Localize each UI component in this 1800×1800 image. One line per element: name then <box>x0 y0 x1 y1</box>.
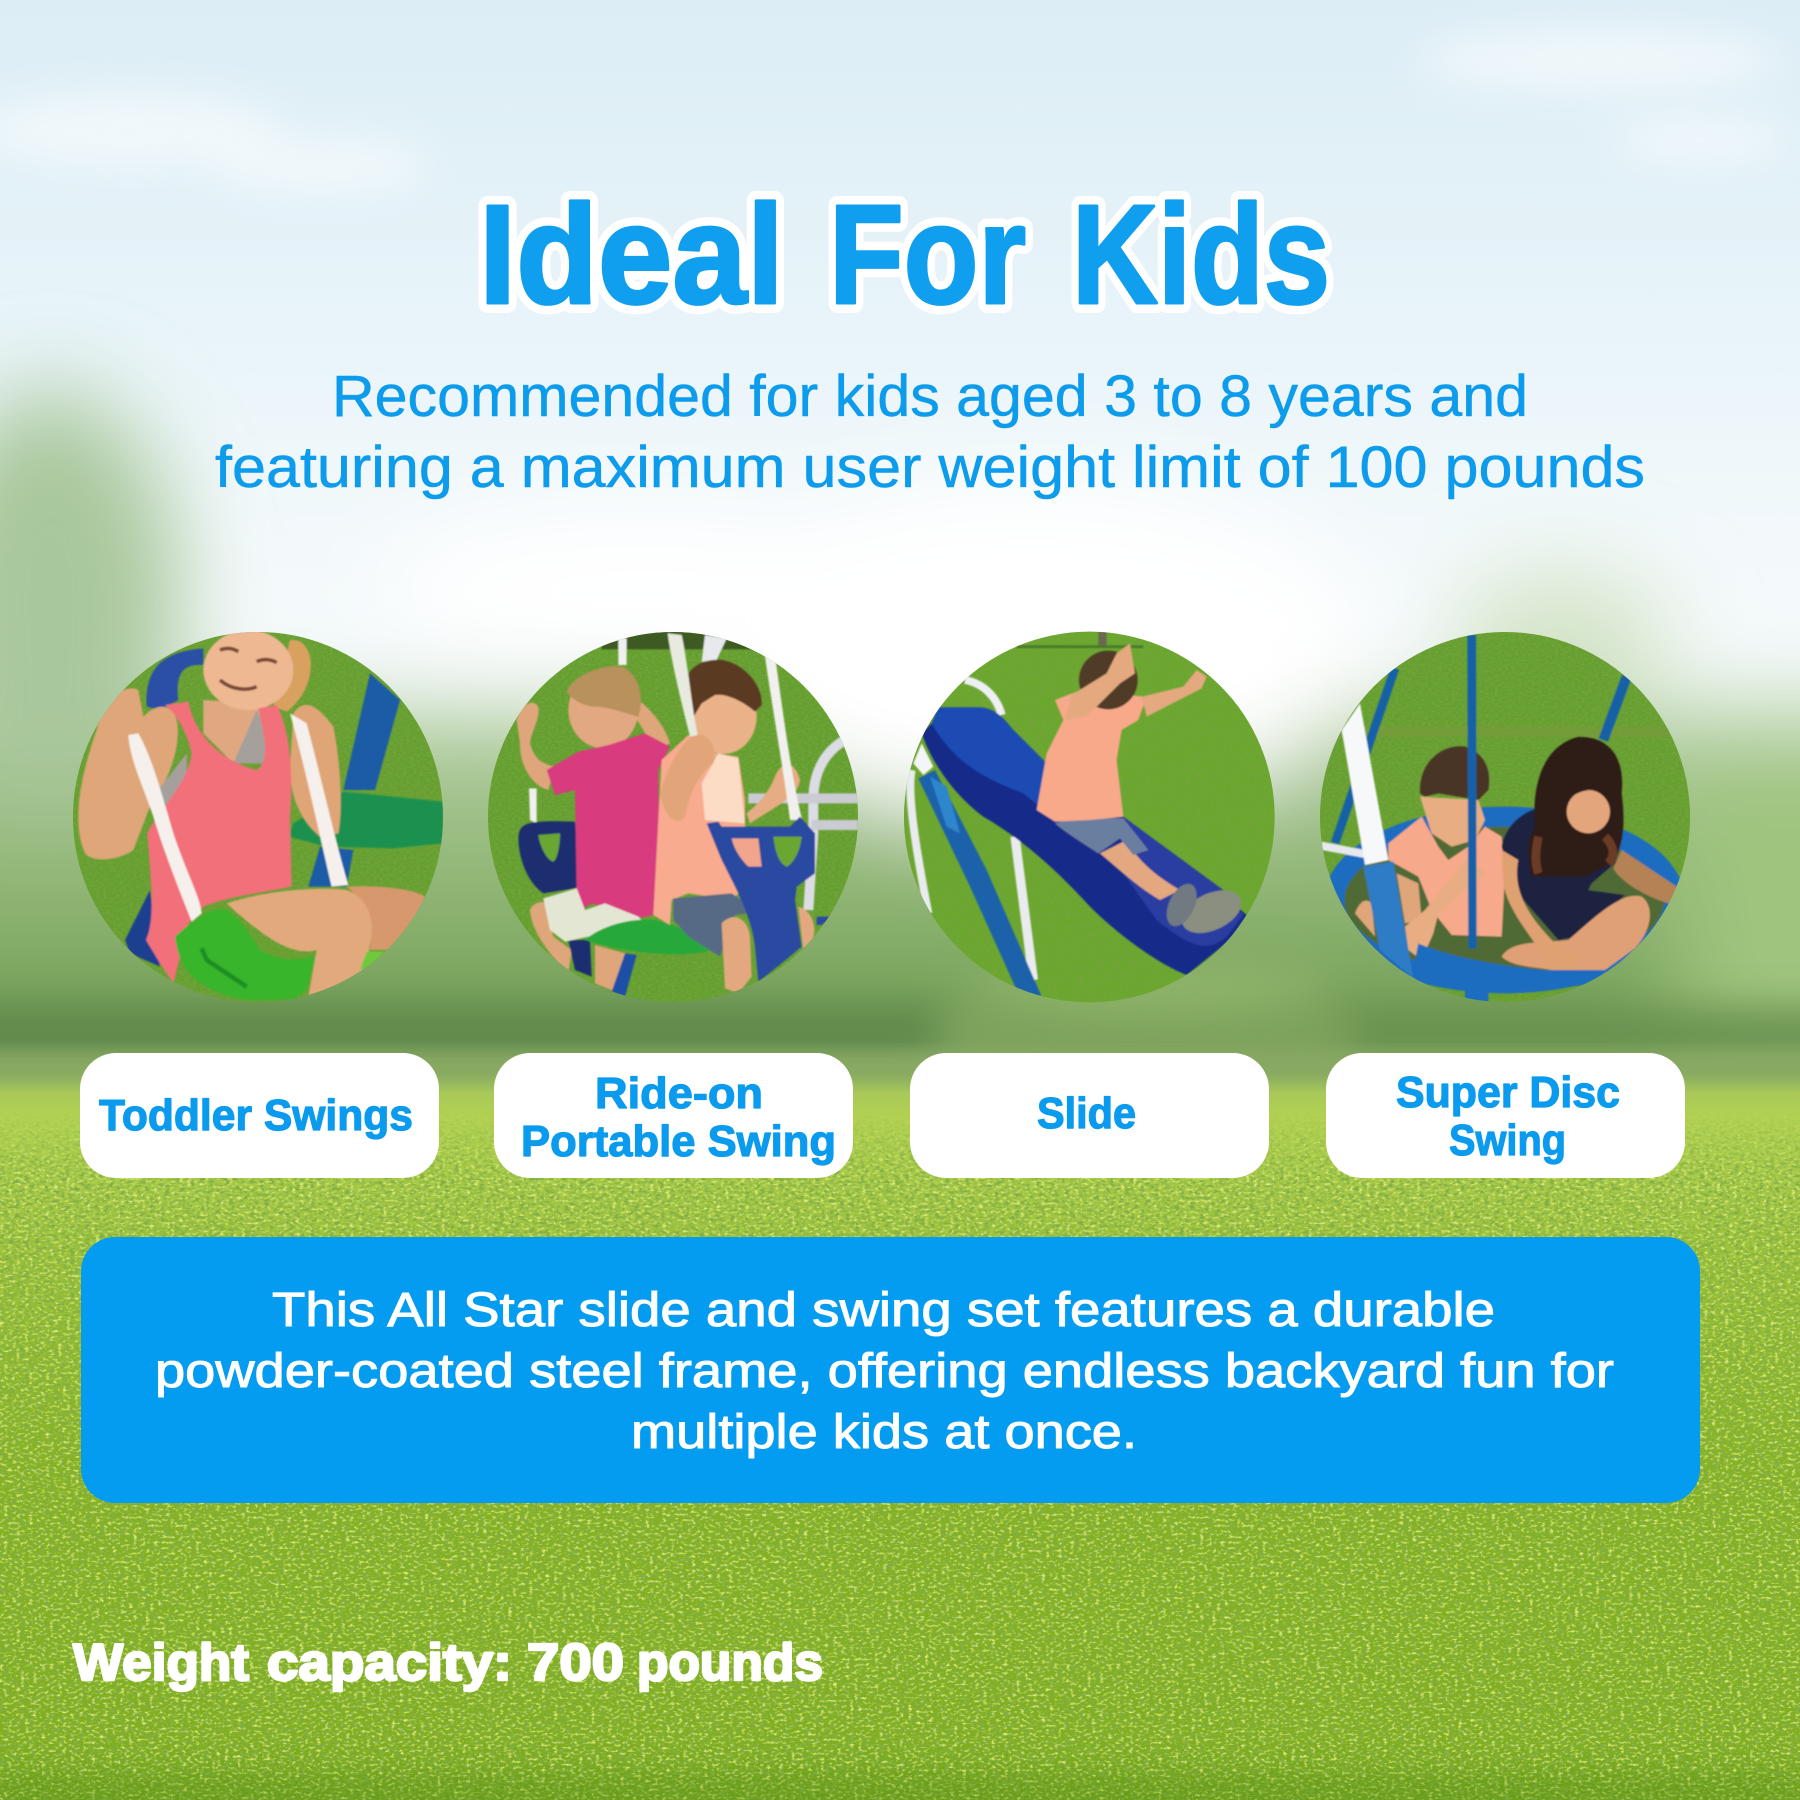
weight capacity note: Weight <box>73 1634 249 1692</box>
label: super disc swing: Super Disc <box>1396 1068 1620 1117</box>
callout panel: product description: powder-coated steel frame, offering endless backyard fun for <box>155 1345 1614 1398</box>
label: slide <box>910 1053 1269 1178</box>
title: Kids <box>1072 175 1330 333</box>
title: For <box>829 175 1026 333</box>
label: super disc swing <box>1326 1053 1685 1178</box>
subtitle: featuring a maximum user weight limit of 100 pounds <box>215 435 1645 500</box>
label: super disc swing: Swing <box>1449 1116 1566 1165</box>
callout panel: product description <box>81 1237 1700 1503</box>
label: toddler swings <box>80 1053 439 1178</box>
label: slide: Slide <box>1037 1089 1136 1138</box>
weight capacity note: 700 <box>527 1634 624 1692</box>
weight capacity note: pounds <box>637 1634 823 1692</box>
photo: ride-on portable swing <box>488 632 858 1002</box>
label: toddler swings: Toddler Swings <box>99 1091 413 1140</box>
photo: toddler swings <box>73 632 443 1002</box>
photo: super disc swing <box>1320 632 1690 1002</box>
label: ride-on portable swing: Portable Swing <box>521 1117 836 1166</box>
callout panel: product description: This All Star slide and swing set features a durable <box>272 1284 1495 1337</box>
photo: slide <box>904 632 1275 1002</box>
subtitle <box>215 364 1645 500</box>
subtitle: Recommended for kids aged 3 to 8 years and <box>332 364 1528 429</box>
weight capacity note: capacity: <box>267 1634 512 1692</box>
title: Ideal <box>479 175 784 333</box>
label: ride-on portable swing: Ride-on <box>595 1069 763 1118</box>
title: For <box>829 175 1026 333</box>
title: Kids <box>1072 175 1330 333</box>
weight capacity note <box>73 1634 823 1692</box>
callout panel: product description: multiple kids at once. <box>631 1406 1137 1459</box>
title <box>479 175 1330 333</box>
title: Ideal <box>479 175 784 333</box>
label: ride-on portable swing <box>494 1053 853 1178</box>
